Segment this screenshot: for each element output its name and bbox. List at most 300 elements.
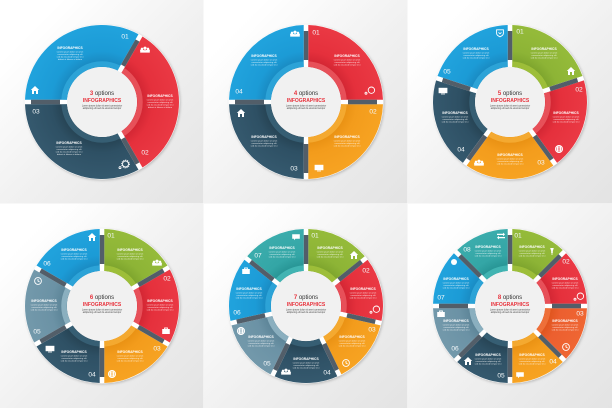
text block 02: Lorem ipsum dolor sit amet bbox=[553, 116, 580, 118]
icon: globe bbox=[108, 370, 116, 378]
centre label: INFOGRAPHICS bbox=[491, 302, 530, 308]
text block 01: sed do eiusmod tempor inci bbox=[519, 254, 546, 258]
text block 03: INFOGRAPHICS bbox=[117, 350, 143, 354]
number 02: 02 bbox=[141, 150, 149, 156]
text block 02 bbox=[552, 277, 579, 290]
text block 02: consectetur adipiscing elit bbox=[553, 118, 579, 121]
text block 02: consectetur adipiscing elit bbox=[552, 284, 578, 287]
text block 07: INFOGRAPHICS bbox=[269, 246, 295, 250]
text block 08: Lorem ipsum dolor sit amet bbox=[475, 250, 502, 252]
text block 04: sed do eiusmod tempor inci bbox=[61, 360, 88, 362]
text block 06 bbox=[61, 248, 88, 260]
icon: gear bbox=[119, 160, 129, 169]
segment 05 bbox=[436, 9, 520, 100]
text block 03 bbox=[552, 319, 579, 332]
icon: ball bbox=[451, 259, 457, 265]
text block 04: Lorem ipsum dolor sit amet bbox=[442, 116, 469, 118]
text block 02: consectetur adipiscing elit bbox=[350, 294, 376, 297]
text block 05: sed do eiusmod tempor inci bbox=[248, 344, 275, 348]
icon: people bbox=[474, 160, 484, 166]
number 04: 04 bbox=[88, 372, 96, 378]
segment 03 bbox=[459, 111, 557, 207]
text block 07: sed do eiusmod tempor inci bbox=[443, 286, 470, 290]
text block 04: consectetur adipiscing elit bbox=[519, 360, 545, 363]
centre label: 8 options bbox=[498, 295, 522, 301]
text block 03: sed do eiusmod tempor inci bbox=[552, 328, 579, 332]
text block 02 bbox=[147, 299, 174, 312]
segment 01 bbox=[25, 25, 138, 104]
number 06: 06 bbox=[451, 346, 459, 352]
panel: 4 options bbox=[204, 0, 408, 204]
centre label: Lorem ipsum dolor sit amet consectetur bbox=[490, 308, 530, 312]
text block 03: sed do eiusmod tempor inci bbox=[339, 344, 366, 348]
text block 03: Lorem ipsum dolor sit amet bbox=[251, 140, 278, 142]
text block 07: Lorem ipsum dolor sit amet bbox=[443, 282, 470, 284]
text block 05: consectetur adipiscing elit bbox=[248, 342, 274, 345]
text block 04: sed do eiusmod tempor inci bbox=[251, 64, 278, 66]
number 03: 03 bbox=[576, 310, 584, 318]
segment 01 bbox=[100, 229, 168, 287]
centre label bbox=[67, 67, 137, 137]
number 02: 02 bbox=[575, 86, 583, 94]
text block 05 bbox=[475, 353, 502, 366]
text block 01: consectetur adipiscing elit bbox=[519, 252, 545, 255]
segment 03 bbox=[536, 304, 587, 359]
text block 02: INFOGRAPHICS bbox=[334, 135, 360, 139]
centre label: Lorem ipsum dolor sit amet consectetur bbox=[286, 308, 326, 312]
segment 02 bbox=[118, 266, 201, 353]
segment 05 bbox=[457, 332, 512, 383]
text block 02: Lorem ipsum dolor sit amet bbox=[147, 98, 174, 102]
panel: 7 options bbox=[204, 204, 408, 408]
number 05: 05 bbox=[443, 68, 451, 76]
text block 06: sed do eiusmod tempor inci bbox=[236, 296, 263, 300]
number 01: 01 bbox=[312, 30, 320, 36]
segment 01 bbox=[304, 25, 383, 100]
number 04: 04 bbox=[549, 358, 557, 366]
segment 02 bbox=[308, 100, 383, 179]
text block 07: consectetur adipiscing elit bbox=[443, 284, 469, 287]
centre label: INFOGRAPHICS bbox=[83, 302, 122, 308]
centre label: adipiscing elit sed do eiusmod tempor bbox=[83, 311, 121, 314]
text block 07: sed do eiusmod tempor inci bbox=[269, 256, 296, 258]
icon: people bbox=[290, 31, 300, 37]
text block 05: INFOGRAPHICS bbox=[463, 47, 489, 51]
centre label: adipiscing elit sed do eiusmod tempor bbox=[287, 311, 325, 314]
text block 01: INFOGRAPHICS bbox=[117, 248, 143, 252]
text block 01 bbox=[317, 246, 344, 258]
text block 02: Lorem ipsum dolor sit amet bbox=[350, 292, 377, 294]
number 02: 02 bbox=[362, 268, 370, 274]
text block 01: sed do eiusmod tempor inci bbox=[317, 256, 344, 258]
text block 04 bbox=[442, 111, 469, 124]
icon: shield bbox=[497, 30, 503, 37]
text block 07: consectetur adipiscing elit bbox=[269, 253, 295, 256]
text block 01 bbox=[519, 245, 546, 258]
centre label: Lorem ipsum dolor sit amet consectetur bbox=[82, 104, 122, 108]
text block 02: sed do eiusmod tempor inci bbox=[334, 144, 361, 148]
icon: monitor bbox=[315, 165, 323, 171]
text block 01: Lorem ipsum dolor sit amet bbox=[317, 250, 344, 254]
text block 01: sed do eiusmod tempor inci bbox=[117, 258, 144, 260]
text block 01 bbox=[57, 46, 84, 61]
segment 02 bbox=[82, 34, 207, 172]
text block 01: sed do eiusmod tempor inci bbox=[531, 56, 558, 60]
panel: 3 options bbox=[0, 0, 207, 207]
number 01: 01 bbox=[311, 232, 319, 240]
text block 03 bbox=[117, 350, 144, 362]
centre label: 6 options bbox=[90, 295, 114, 301]
number 04: 04 bbox=[457, 146, 465, 154]
number 01: 01 bbox=[514, 232, 522, 240]
centre label bbox=[271, 67, 341, 137]
number 07: 07 bbox=[437, 294, 445, 302]
icon: clock bbox=[35, 278, 41, 284]
text block 02: didunt ut labore et dolore bbox=[148, 106, 173, 109]
centre label: 7 options bbox=[294, 295, 318, 301]
text block 04 bbox=[293, 357, 320, 370]
number 05: 05 bbox=[263, 360, 271, 368]
text block 04 bbox=[61, 350, 88, 362]
segment 05 bbox=[3, 259, 86, 346]
text block 02: sed do eiusmod tempor inci bbox=[552, 286, 579, 290]
text block 01: Lorem ipsum dolor sit amet bbox=[531, 52, 558, 54]
text block 01: consectetur adipiscing elit bbox=[531, 54, 557, 57]
text block 03: didunt ut labore et dolore bbox=[57, 153, 82, 156]
text block 04: Lorem ipsum dolor sit amet bbox=[251, 58, 278, 62]
text block 02: INFOGRAPHICS bbox=[147, 94, 173, 98]
text block 02: INFOGRAPHICS bbox=[553, 111, 579, 115]
segment 06 bbox=[34, 211, 118, 298]
text block 01: INFOGRAPHICS bbox=[334, 54, 360, 58]
icon: circles bbox=[365, 87, 375, 94]
panel: 8 options bbox=[408, 204, 612, 408]
number 03: 03 bbox=[32, 108, 40, 116]
text block 02: sed do eiusmod tempor inci bbox=[350, 296, 377, 300]
text block 05: Lorem ipsum dolor sit amet bbox=[248, 340, 275, 342]
segment 03 bbox=[86, 314, 170, 401]
number 01: 01 bbox=[107, 232, 115, 240]
icon: home bbox=[88, 233, 96, 241]
text block 02: INFOGRAPHICS bbox=[350, 287, 376, 291]
segment 02 bbox=[522, 76, 606, 167]
number 01: 01 bbox=[121, 34, 129, 40]
centre label bbox=[475, 271, 545, 341]
number 03: 03 bbox=[537, 160, 545, 166]
segment 01 bbox=[508, 25, 582, 89]
text block 03: sed do eiusmod tempor inci bbox=[497, 162, 524, 166]
text block 04: INFOGRAPHICS bbox=[293, 357, 319, 361]
text block 05: Lorem ipsum dolor sit amet bbox=[475, 358, 502, 360]
text block 01 bbox=[334, 54, 361, 66]
text block 03 bbox=[339, 335, 366, 348]
text block 01: INFOGRAPHICS bbox=[519, 245, 545, 249]
text block 03: INFOGRAPHICS bbox=[56, 141, 82, 145]
text block 04: Lorem ipsum dolor sit amet bbox=[293, 362, 320, 364]
text block 06: sed do eiusmod tempor inci bbox=[61, 258, 88, 260]
text block 06: sed do eiusmod tempor inci bbox=[443, 328, 470, 332]
text block 08: consectetur adipiscing elit bbox=[475, 252, 501, 255]
text block 01 bbox=[117, 248, 144, 260]
text block 06 bbox=[443, 319, 470, 332]
text block 06: Lorem ipsum dolor sit amet bbox=[443, 324, 470, 326]
text block 05: INFOGRAPHICS bbox=[475, 353, 501, 357]
centre label: INFOGRAPHICS bbox=[287, 302, 326, 308]
segment 04 bbox=[229, 25, 304, 104]
text block 03: consectetur adipiscing elit bbox=[339, 342, 365, 345]
icon: clock bbox=[343, 360, 349, 366]
segment 03 bbox=[316, 309, 382, 380]
text block 02: consectetur adipiscing elit bbox=[147, 306, 173, 309]
text block 04: INFOGRAPHICS bbox=[61, 350, 87, 354]
segment 04 bbox=[263, 326, 341, 401]
text block 08 bbox=[475, 245, 502, 258]
text block 04: sed do eiusmod tempor inci bbox=[293, 366, 320, 370]
text block 05: INFOGRAPHICS bbox=[31, 299, 57, 303]
icon: circles bbox=[370, 306, 380, 313]
text block 03: sed do eiusmod tempor inci bbox=[251, 144, 278, 148]
segment 01 bbox=[304, 229, 365, 282]
number 03: 03 bbox=[153, 346, 161, 352]
text block 04: sed do eiusmod tempor inci bbox=[442, 120, 469, 124]
text block 05: INFOGRAPHICS bbox=[248, 335, 274, 339]
panel: 5 options bbox=[406, 0, 612, 207]
text block 07: Lorem ipsum dolor sit amet bbox=[269, 250, 296, 254]
text block 01: Lorem ipsum dolor sit amet bbox=[57, 50, 84, 54]
text block 01: Lorem ipsum dolor sit amet bbox=[519, 250, 546, 252]
text block 03 bbox=[251, 135, 278, 148]
centre label: adipiscing elit sed do eiusmod tempor bbox=[491, 311, 529, 314]
centre label: adipiscing elit sed do eiusmod tempor bbox=[491, 107, 529, 110]
text block 01: Lorem ipsum dolor sit amet bbox=[334, 58, 361, 62]
text block 05 bbox=[463, 47, 490, 60]
icon: home bbox=[464, 357, 472, 365]
number 06: 06 bbox=[233, 310, 241, 316]
text block 03: consectetur adipiscing elit bbox=[251, 142, 277, 145]
text block 03 bbox=[497, 153, 524, 166]
text block 05: consectetur adipiscing elit bbox=[475, 360, 501, 363]
text block 02 bbox=[553, 111, 580, 124]
icon: arrows bbox=[497, 233, 505, 239]
text block 08: INFOGRAPHICS bbox=[475, 245, 501, 249]
text block 04: Lorem ipsum dolor sit amet bbox=[61, 354, 88, 358]
text block 01: consectetur adipiscing elit bbox=[317, 253, 343, 256]
text block 01: INFOGRAPHICS bbox=[531, 47, 557, 51]
text block 05: sed do eiusmod tempor inci bbox=[463, 56, 490, 60]
centre label: adipiscing elit sed do eiusmod tempor bbox=[83, 107, 121, 110]
text block 02: INFOGRAPHICS bbox=[147, 299, 173, 303]
text block 06: consectetur adipiscing elit bbox=[236, 294, 262, 297]
icon: message bbox=[516, 372, 524, 378]
segment 06 bbox=[218, 254, 284, 325]
text block 03 bbox=[56, 141, 83, 156]
icon: home bbox=[237, 109, 245, 117]
text block 01: consectetur adipiscing elit bbox=[57, 53, 83, 56]
centre label: 5 options bbox=[498, 91, 522, 97]
segment 03 bbox=[17, 69, 142, 207]
centre label bbox=[475, 67, 545, 137]
text block 02 bbox=[147, 94, 174, 109]
centre label: INFOGRAPHICS bbox=[83, 98, 122, 104]
number 05: 05 bbox=[33, 328, 41, 336]
centre label: 4 options bbox=[294, 91, 318, 97]
text block 04: INFOGRAPHICS bbox=[251, 54, 277, 58]
text block 04: INFOGRAPHICS bbox=[442, 111, 468, 115]
text block 04 bbox=[251, 54, 278, 66]
text block 04: consectetur adipiscing elit bbox=[251, 61, 277, 64]
number 02: 02 bbox=[163, 276, 171, 282]
text block 04: sed do eiusmod tempor inci bbox=[519, 362, 546, 366]
text block 03: INFOGRAPHICS bbox=[251, 135, 277, 139]
icon: monitor bbox=[439, 88, 447, 94]
text block 03: consectetur adipiscing elit bbox=[497, 160, 523, 163]
segment 02 bbox=[527, 250, 602, 325]
number 07: 07 bbox=[254, 252, 262, 260]
text block 07 bbox=[269, 246, 296, 258]
number 08: 08 bbox=[463, 246, 471, 254]
segment 01 bbox=[508, 229, 563, 280]
text block 02: Lorem ipsum dolor sit amet bbox=[334, 140, 361, 142]
text block 04: INFOGRAPHICS bbox=[519, 353, 545, 357]
text block 06: INFOGRAPHICS bbox=[443, 319, 469, 323]
segment 05 bbox=[220, 302, 298, 376]
icon: message bbox=[292, 234, 300, 240]
icon: globe bbox=[237, 327, 245, 335]
icon: circles bbox=[574, 293, 584, 300]
text block 03: Lorem ipsum dolor sit amet bbox=[339, 340, 366, 342]
text block 01: INFOGRAPHICS bbox=[317, 246, 343, 250]
text block 06 bbox=[236, 287, 263, 300]
text block 05: sed do eiusmod tempor inci bbox=[31, 308, 58, 312]
text block 02 bbox=[350, 287, 377, 300]
text block 03: Lorem ipsum dolor sit amet bbox=[56, 146, 83, 148]
text block 02: Lorem ipsum dolor sit amet bbox=[552, 282, 579, 284]
text block 01: INFOGRAPHICS bbox=[57, 46, 83, 50]
centre label bbox=[271, 271, 341, 341]
text block 02: consectetur adipiscing elit bbox=[147, 101, 173, 104]
text block 03: Lorem ipsum dolor sit amet bbox=[117, 354, 144, 358]
icon: monitor bbox=[46, 346, 54, 352]
text block 03: INFOGRAPHICS bbox=[339, 335, 365, 339]
segment 07 bbox=[244, 212, 324, 293]
text block 05 bbox=[31, 299, 58, 312]
text block 01: Lorem ipsum dolor sit amet bbox=[117, 252, 144, 256]
segment 07 bbox=[433, 253, 484, 308]
text block 05: Lorem ipsum dolor sit amet bbox=[463, 52, 490, 54]
text block 06: INFOGRAPHICS bbox=[236, 287, 262, 291]
icon: people bbox=[152, 260, 162, 266]
text block 06: Lorem ipsum dolor sit amet bbox=[61, 252, 88, 256]
icon: home bbox=[31, 86, 39, 94]
text block 06: Lorem ipsum dolor sit amet bbox=[236, 292, 263, 294]
text block 01: sed do eiusmod tempor inci bbox=[57, 56, 84, 58]
text block 04: consectetur adipiscing elit bbox=[442, 118, 468, 121]
segment 04 bbox=[406, 70, 504, 166]
text block 02: INFOGRAPHICS bbox=[552, 277, 578, 281]
text block 03: Lorem ipsum dolor sit amet bbox=[552, 324, 579, 326]
text block 02: consectetur adipiscing elit bbox=[334, 142, 360, 145]
icon: people bbox=[281, 369, 291, 375]
text block 02: sed do eiusmod tempor inci bbox=[553, 120, 580, 124]
icon: clock bbox=[563, 344, 569, 350]
centre label: Lorem ipsum dolor sit amet consectetur bbox=[490, 104, 530, 108]
text block 01 bbox=[531, 47, 558, 60]
number 03: 03 bbox=[368, 326, 376, 334]
segment 04 bbox=[36, 325, 104, 383]
text block 01: consectetur adipiscing elit bbox=[334, 61, 360, 64]
icon: home bbox=[350, 251, 358, 259]
number 01: 01 bbox=[516, 28, 524, 36]
segment 08 bbox=[454, 214, 529, 289]
text block 03: INFOGRAPHICS bbox=[497, 153, 523, 157]
text block 04: Lorem ipsum dolor sit amet bbox=[519, 358, 546, 360]
icon: briefcase bbox=[162, 328, 170, 334]
centre label bbox=[67, 271, 137, 341]
text block 07: INFOGRAPHICS bbox=[443, 277, 469, 281]
number 06: 06 bbox=[43, 260, 51, 268]
text block 06: consectetur adipiscing elit bbox=[443, 326, 469, 329]
text block 06: consectetur adipiscing elit bbox=[61, 255, 87, 258]
text block 06: INFOGRAPHICS bbox=[61, 248, 87, 252]
segment 02 bbox=[323, 256, 403, 337]
number 02: 02 bbox=[369, 108, 377, 116]
centre label: adipiscing elit sed do eiusmod tempor bbox=[287, 107, 325, 110]
text block 05 bbox=[248, 335, 275, 348]
text block 03: consectetur adipiscing elit bbox=[552, 326, 578, 329]
icon: home bbox=[567, 67, 575, 75]
text block 04: consectetur adipiscing elit bbox=[61, 357, 87, 360]
icon: briefcase bbox=[242, 268, 250, 274]
text block 03: Lorem ipsum dolor sit amet bbox=[497, 158, 524, 160]
text block 03: sed do eiusmod tempor inci bbox=[56, 150, 83, 154]
text block 07 bbox=[443, 277, 470, 290]
text block 02 bbox=[334, 135, 361, 148]
text block 05: consectetur adipiscing elit bbox=[463, 54, 489, 57]
centre label: Lorem ipsum dolor sit amet consectetur bbox=[82, 308, 122, 312]
text block 04: consectetur adipiscing elit bbox=[293, 364, 319, 367]
text block 05: sed do eiusmod tempor inci bbox=[475, 362, 502, 366]
number 04: 04 bbox=[323, 370, 331, 376]
text block 03: sed do eiusmod tempor inci bbox=[117, 360, 144, 362]
icon: lightbulb bbox=[550, 248, 554, 254]
text block 02: Lorem ipsum dolor sit amet bbox=[147, 304, 174, 306]
icon: people bbox=[140, 47, 150, 53]
text block 02: sed do eiusmod tempor inci bbox=[147, 308, 174, 312]
number 03: 03 bbox=[290, 166, 298, 172]
text block 05: Lorem ipsum dolor sit amet bbox=[31, 304, 58, 306]
icon: briefcase bbox=[437, 311, 445, 317]
number 02: 02 bbox=[562, 258, 570, 266]
centre label: Lorem ipsum dolor sit amet consectetur bbox=[286, 104, 326, 108]
panel: 6 options bbox=[0, 204, 204, 408]
centre label: INFOGRAPHICS bbox=[491, 98, 530, 104]
text block 01: sed do eiusmod tempor inci bbox=[334, 64, 361, 66]
segment 06 bbox=[418, 287, 493, 362]
text block 05: consectetur adipiscing elit bbox=[31, 306, 57, 309]
icon: globe bbox=[555, 145, 563, 153]
text block 01: consectetur adipiscing elit bbox=[117, 255, 143, 258]
text block 03: consectetur adipiscing elit bbox=[117, 357, 143, 360]
text block 03: consectetur adipiscing elit bbox=[56, 148, 82, 151]
text block 03: INFOGRAPHICS bbox=[552, 319, 578, 323]
number 04: 04 bbox=[235, 88, 243, 96]
text block 01: didunt ut labore et dolore bbox=[58, 58, 83, 61]
text block 02: sed do eiusmod tempor inci bbox=[147, 104, 174, 106]
centre label: INFOGRAPHICS bbox=[287, 98, 326, 104]
centre label: 3 options bbox=[90, 91, 114, 97]
number 05: 05 bbox=[497, 372, 505, 380]
segment 04 bbox=[491, 323, 566, 398]
